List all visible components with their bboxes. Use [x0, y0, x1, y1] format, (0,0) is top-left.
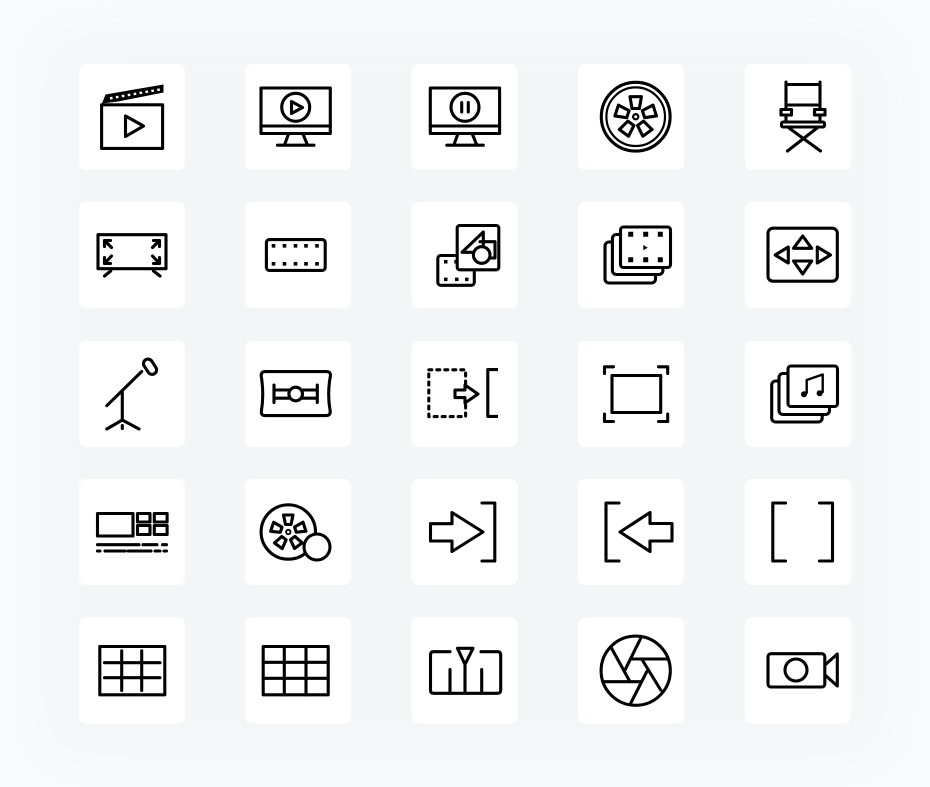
icon: rectangle with corner marks	[604, 367, 668, 422]
panel: grid	[245, 618, 351, 724]
icon: stacked film frames	[605, 227, 670, 283]
panel: tv expand	[79, 202, 185, 308]
icon: video camera	[768, 654, 837, 687]
icon: film reel wheel	[601, 82, 670, 151]
panel: director chair	[745, 64, 851, 170]
panel: film gate	[245, 341, 351, 447]
icon: rule of thirds grid	[100, 646, 165, 695]
panel: editing timeline	[79, 479, 185, 585]
panel: brackets	[745, 479, 851, 585]
panel: arrow from bracket	[578, 479, 684, 585]
icon: film frame with shapes card	[438, 226, 499, 285]
icon: dashed box, arrow and bracket	[429, 370, 498, 417]
panel: arrow into bracket	[412, 479, 518, 585]
icon: camera aperture	[601, 636, 670, 705]
icon: stacked music cards	[772, 366, 838, 422]
icon: direction arrows box	[768, 228, 837, 281]
panel: microphone stand	[79, 341, 185, 447]
panel: film strip	[245, 202, 351, 308]
icon: film strip	[266, 240, 325, 270]
panel: direction pad	[745, 202, 851, 308]
icon: film reel with small circle	[261, 505, 330, 560]
panel: grid with crossing lines	[79, 618, 185, 724]
icon: arrow pointing to right bracket	[430, 503, 495, 561]
panel: frame focus	[578, 341, 684, 447]
icon: boom microphone stand	[107, 357, 158, 429]
panel: music stack	[745, 341, 851, 447]
panel: monitor pause	[412, 64, 518, 170]
icon: tv with expand arrows	[98, 235, 166, 276]
icon: monitor with pause button	[430, 88, 500, 145]
icon: timeline layout	[98, 514, 167, 551]
icon: arrow pointing to left bracket	[606, 503, 672, 561]
panel: clapperboard	[79, 64, 185, 170]
icon: monitor with play button	[261, 88, 330, 145]
icon: three by three grid	[263, 646, 328, 695]
icon: frame with antenna triangle	[430, 648, 501, 693]
icon: pincushion frame	[261, 372, 330, 416]
panel: aperture	[578, 618, 684, 724]
icon: director chair	[781, 82, 825, 151]
icon: pair of square brackets	[773, 503, 832, 561]
panel: film reel	[578, 64, 684, 170]
panel: move into frame	[412, 341, 518, 447]
panel: reel with circle	[245, 479, 351, 585]
panel: monitor play	[245, 64, 351, 170]
panel: antenna frame	[412, 618, 518, 724]
icon: clapperboard with play	[102, 84, 164, 148]
panel: film and shapes	[412, 202, 518, 308]
panel: film stack	[578, 202, 684, 308]
panel: video camera	[745, 618, 851, 724]
